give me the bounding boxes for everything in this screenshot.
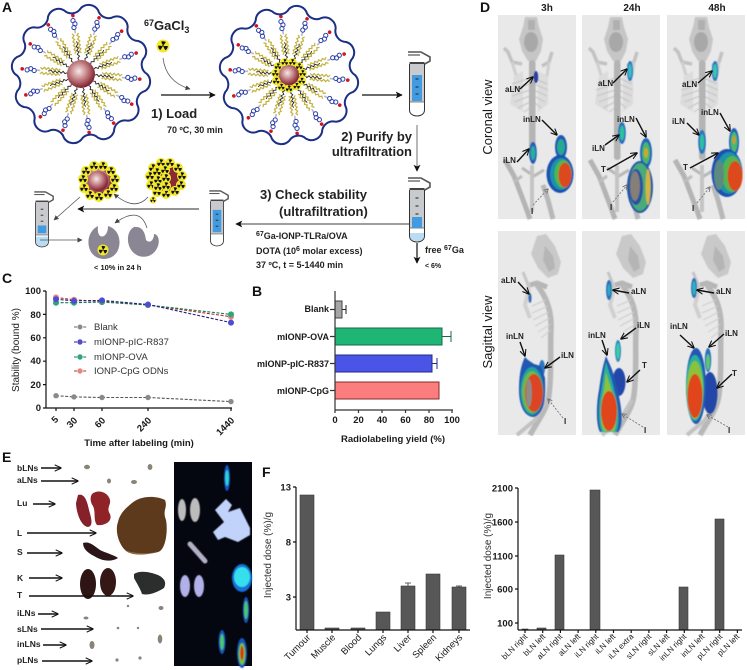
series: Blank xyxy=(53,393,234,404)
conditions text: 67 xyxy=(256,231,264,238)
image: coronal 48h: T xyxy=(683,163,688,172)
chart: lymph nodes: sLN right xyxy=(624,632,654,661)
organ labels: S xyxy=(17,547,23,557)
image: coronal 24h: iLN xyxy=(592,144,605,153)
image: sagittal 24h: aLN xyxy=(631,287,646,296)
image: sagittal 48h xyxy=(667,231,745,435)
label C: C xyxy=(2,270,12,286)
image: sagittal 24h: I xyxy=(644,426,646,435)
y axis title: Stability (bound %) xyxy=(11,308,22,392)
chart: lymph nodes: inLN left xyxy=(679,632,707,659)
series: IONP-CpG ODNs xyxy=(53,294,234,320)
image: sagittal 24h xyxy=(582,231,660,435)
category labels xyxy=(257,304,330,396)
chart: lymph nodes xyxy=(483,484,742,663)
curved arrow between proteins xyxy=(115,215,147,228)
x tick labels xyxy=(332,415,460,426)
cluster: densely covered particle xyxy=(145,158,187,199)
chart: lymph nodes: Injected dose (%)/g xyxy=(483,513,494,599)
chart: lymph nodes: 100 xyxy=(497,618,513,630)
image: sagittal 24h: T xyxy=(642,361,647,370)
chart: lymph nodes: 1100 xyxy=(492,552,513,562)
organ labels: L xyxy=(17,528,22,538)
x tick labels: 240 xyxy=(135,415,154,434)
image: coronal 48h: I xyxy=(692,204,694,213)
organ labels: pLNs xyxy=(17,655,39,665)
image: sagittal 24h: inLN xyxy=(588,331,606,340)
x tick labels: 5 xyxy=(50,414,62,426)
step 1 conditions: 70 ºC, 30 min xyxy=(167,125,223,135)
nanoparticle before loading xyxy=(12,5,150,143)
step 3 text: (ultrafiltration) xyxy=(279,204,368,219)
image: coronal 48h: inLN xyxy=(701,108,719,117)
chart: lymph nodes: 600 xyxy=(497,584,513,596)
chart: organs: Kidneys xyxy=(433,632,465,664)
chart: organs: 13 xyxy=(280,482,291,494)
panel D: SPECT imaging xyxy=(480,0,745,435)
free gallium text: 67 xyxy=(444,245,452,252)
label E: E xyxy=(2,449,11,465)
chart: lymph nodes: aLN left xyxy=(557,632,583,658)
chart: organs: Blood xyxy=(339,632,364,657)
x axis title: Radiolabeling yield (%) xyxy=(341,434,445,445)
panel B: radiolabeling yield bar chart xyxy=(252,283,460,445)
y tick labels: 0 xyxy=(36,403,41,414)
image: coronal 3h xyxy=(498,15,576,219)
label B: B xyxy=(252,283,262,299)
under six percent text: < 6% xyxy=(425,263,442,270)
fluorescence image xyxy=(174,462,252,668)
conditions text: DOTA (10 xyxy=(256,246,362,256)
chart: lymph nodes: inLN right xyxy=(658,632,689,663)
step 1 text: 1) Load xyxy=(151,106,197,121)
panel A: radiolabeling scheme xyxy=(2,0,465,272)
legend: mIONP-pIC-R837 xyxy=(94,337,169,348)
x tick labels: 0 xyxy=(332,415,338,426)
bar: Blank xyxy=(335,301,346,318)
image: sagittal 3h: inLN xyxy=(506,332,524,341)
free gallium text: free xyxy=(425,245,442,255)
image: sagittal 24h: iLN xyxy=(637,321,650,330)
conditions text: 37 ºC, t = 5-1440 min xyxy=(256,260,343,270)
bar: mIONP-OVA xyxy=(335,328,451,345)
panel F: biodistribution charts xyxy=(262,464,742,664)
image: sagittal 48h: I xyxy=(728,426,730,435)
y tick labels: 80 xyxy=(30,310,41,321)
x tick labels xyxy=(50,414,237,438)
arrow to stability tube xyxy=(236,223,409,225)
organ labels: iLNs xyxy=(17,608,36,618)
arrow from cluster to tube xyxy=(54,197,80,220)
chart: lymph nodes: iLN left xyxy=(593,632,618,656)
image: coronal 48h xyxy=(667,15,745,219)
arrow down to free gallium xyxy=(416,243,418,263)
step 2 text: ultrafiltration xyxy=(332,144,412,159)
image: coronal 24h: aLN xyxy=(598,79,613,88)
organ labels: aLNs xyxy=(17,475,38,485)
panel E: ex vivo organs xyxy=(2,449,252,668)
image: coronal 24h: T xyxy=(601,165,606,174)
x tick labels: 100 xyxy=(444,415,460,426)
y tick labels: 40 xyxy=(30,356,41,367)
image: sagittal 48h: inLN xyxy=(670,322,688,331)
conditions text: Ga-IONP-TLRa/OVA xyxy=(264,231,348,241)
axes xyxy=(330,291,453,413)
organ labels: Lu xyxy=(17,498,27,508)
arrow to filtered tube xyxy=(78,208,199,210)
load arrow xyxy=(161,94,215,96)
row heading coronal: Coronal view xyxy=(480,79,495,155)
x tick labels: 60 xyxy=(400,415,411,426)
organ labels: sLNs xyxy=(17,624,38,634)
organ labels: T xyxy=(17,590,23,600)
chart: organs: Injected dose (%)/g xyxy=(263,512,274,598)
chart: organs: Muscle xyxy=(309,632,338,661)
step 2 text: 2) Purify by xyxy=(341,129,413,144)
image: sagittal 48h: T xyxy=(732,369,737,378)
curved arrow between clusters xyxy=(114,194,148,204)
arrow to first tube xyxy=(362,94,402,96)
chart: lymph nodes: aLN right xyxy=(535,632,565,661)
image: sagittal 48h: iLN xyxy=(725,329,738,338)
chart: organs: 3 xyxy=(286,592,291,604)
chart: organs: Spleen xyxy=(410,632,439,661)
chart: lymph nodes: bLN right xyxy=(500,632,530,661)
tube: filtered xyxy=(34,192,53,247)
column heading 48h: 48h xyxy=(708,3,726,14)
chart: organs xyxy=(263,482,470,664)
column heading 24h: 24h xyxy=(623,3,641,14)
x tick labels: 1440 xyxy=(214,415,237,438)
step 3 text: 3) Check stability xyxy=(260,187,368,202)
category labels: mIONP-pIC-R837 xyxy=(257,359,329,369)
category labels: mIONP-OVA xyxy=(277,332,329,342)
curved loading arrow xyxy=(163,58,190,89)
tube: purification xyxy=(408,52,430,116)
conditions text: molar excess) xyxy=(300,246,362,256)
x tick labels: 30 xyxy=(65,415,80,431)
chart: organs: Lungs xyxy=(363,632,389,658)
gallium chloride reagent: 67 xyxy=(144,18,154,28)
column heading 3h: 3h xyxy=(541,3,553,14)
image: coronal 48h: iLN xyxy=(672,117,685,126)
image: coronal 48h: aLN xyxy=(682,80,697,89)
image: coronal 3h: iLN xyxy=(503,156,516,165)
conditions text: 6 xyxy=(296,246,300,253)
category labels: mIONP-CpG xyxy=(277,386,329,396)
purify arrow xyxy=(416,125,418,171)
image: coronal 24h: I xyxy=(610,203,612,212)
legend xyxy=(74,322,169,377)
arrow to protein xyxy=(40,239,82,241)
bar: mIONP-CpG xyxy=(335,382,439,399)
chart: lymph nodes: iLN right xyxy=(573,632,601,659)
x axis title: Time after labeling (min) xyxy=(84,438,194,449)
y axis xyxy=(43,291,232,411)
y tick labels: 20 xyxy=(30,380,41,391)
series: mIONP-OVA xyxy=(53,299,234,317)
y tick labels xyxy=(25,286,41,414)
panel C: stability line chart xyxy=(2,270,237,449)
chart: lymph nodes: 2100 xyxy=(492,484,513,494)
series: mIONP-pIC-R837 xyxy=(53,296,234,326)
legend: mIONP-OVA xyxy=(94,352,148,363)
organ labels: K xyxy=(17,573,24,583)
image: coronal 3h: I xyxy=(531,207,533,216)
free gallium text: Ga xyxy=(452,245,465,255)
x tick labels: 20 xyxy=(353,415,364,426)
chart: lymph nodes: bLN left xyxy=(522,632,548,658)
row heading sagittal: Sagittal view xyxy=(480,295,495,368)
y tick labels: 100 xyxy=(25,286,41,297)
x tick labels: 80 xyxy=(424,415,434,426)
image: sagittal 3h: iLN xyxy=(561,351,574,360)
empty protein xyxy=(128,227,159,257)
image: coronal 24h: inLN xyxy=(617,115,635,124)
label F: F xyxy=(262,464,271,480)
chart: lymph nodes: sLN left xyxy=(646,632,672,658)
chart: organs: 8 xyxy=(286,538,291,548)
protein with bound radionuclide xyxy=(88,226,120,259)
chart: organs: Tumour xyxy=(282,632,313,663)
image: coronal 3h: aLN xyxy=(505,85,520,94)
x tick labels: 40 xyxy=(377,415,387,426)
y tick labels: 60 xyxy=(30,333,41,344)
tube: after purification xyxy=(408,178,430,242)
image: sagittal 3h: I xyxy=(564,417,566,426)
chart: lymph nodes: pLN left xyxy=(716,632,742,658)
organ labels: bLNs xyxy=(17,463,39,473)
cluster: partly covered particle xyxy=(78,161,120,202)
icon: radioactive trefoil xyxy=(156,40,170,52)
x tick labels: 60 xyxy=(93,415,108,431)
image: coronal 3h: inLN xyxy=(523,115,541,124)
bar: mIONP-pIC-R837 xyxy=(335,355,437,372)
chart: lymph nodes: iLN extra xyxy=(606,632,636,661)
organ arrows xyxy=(27,468,133,661)
gallium chloride reagent: GaCl xyxy=(154,18,184,33)
image: coronal 24h xyxy=(582,15,660,219)
image: sagittal 3h: aLN xyxy=(501,276,516,285)
icon: small released radionuclide xyxy=(149,196,157,204)
gallium chloride reagent: 3 xyxy=(184,25,189,35)
legend: IONP-CpG ODNs xyxy=(94,366,169,377)
under ten percent text: < 10% in 24 h xyxy=(94,263,142,272)
category labels: Blank xyxy=(304,304,330,314)
organ labels xyxy=(17,463,41,665)
organ photographs xyxy=(76,464,167,662)
organ labels: inLNs xyxy=(17,639,41,649)
tube: stability xyxy=(209,191,228,246)
chart: lymph nodes: pLN right xyxy=(695,632,725,661)
image: sagittal 48h: aLN xyxy=(716,287,731,296)
image: sagittal 3h xyxy=(498,231,576,435)
nanoparticle after loading xyxy=(220,6,358,144)
legend: Blank xyxy=(94,322,118,333)
chart: organs: Liver xyxy=(392,632,414,655)
chart: lymph nodes: 1600 xyxy=(492,518,513,528)
